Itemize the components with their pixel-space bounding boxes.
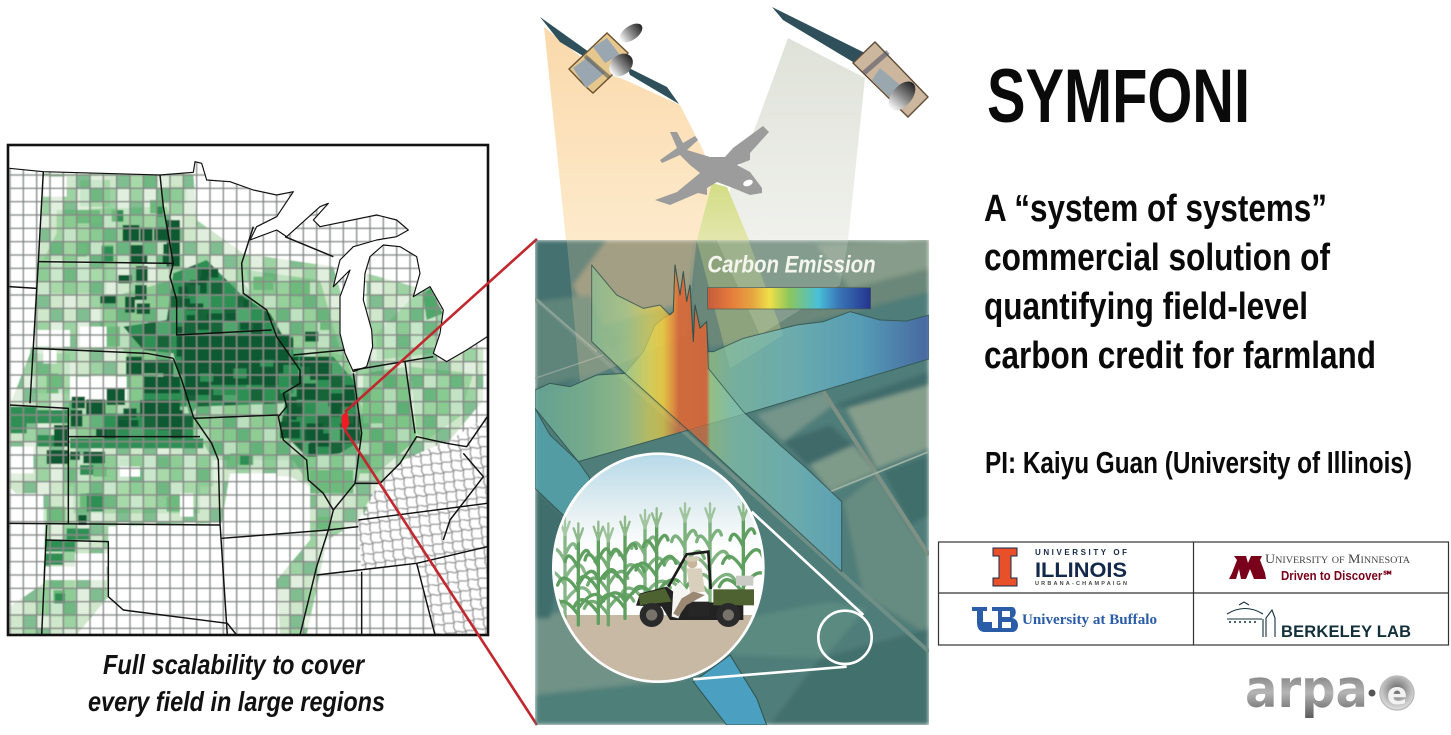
description: commercial solution of bbox=[984, 237, 1330, 279]
legend: carbon emission colour bar: Carbon Emission bbox=[707, 251, 876, 278]
map frame bbox=[8, 145, 488, 635]
emission curtains bbox=[535, 265, 929, 725]
description: quantifying field-level bbox=[984, 286, 1308, 328]
map caption bbox=[88, 649, 385, 717]
logo: University of Illinois: ILLINOIS bbox=[1035, 559, 1127, 582]
county-level mottling bbox=[9, 173, 483, 635]
logo: University of Minnesota: Driven to Discover℠ bbox=[1281, 569, 1394, 583]
callout lines from map to field panel bbox=[342, 239, 537, 725]
corn plants bbox=[541, 502, 769, 625]
logo: University of Minnesota bbox=[1229, 552, 1411, 583]
partner logo table bbox=[938, 542, 1448, 645]
map: crop intensity by county bbox=[8, 145, 488, 635]
logo: University at Buffalo: University at Buffalo bbox=[1022, 612, 1157, 628]
logo: ARPA-E: e bbox=[1387, 677, 1407, 712]
county boundaries bbox=[8, 145, 488, 635]
aircraft bbox=[655, 126, 769, 205]
field panel: aerial image with carbon emission curtain bbox=[535, 238, 929, 725]
description: A “system of systems” bbox=[984, 188, 1327, 230]
map caption: every field in large regions bbox=[88, 686, 385, 717]
zoom lens bbox=[693, 512, 872, 679]
logo: University of Illinois: UNIVERSITY OF bbox=[1035, 548, 1127, 557]
logo: Berkeley Lab: BERKELEY LAB bbox=[1281, 623, 1411, 641]
logo: University of Minnesota: University of Minnesota bbox=[1265, 552, 1411, 566]
map caption: Full scalability to cover bbox=[103, 649, 366, 680]
inset: corn field and field vehicle bbox=[541, 454, 770, 685]
description: carbon credit for farmland bbox=[984, 335, 1376, 377]
satellite and aircraft sensor beams bbox=[544, 27, 865, 240]
utility vehicle with driver bbox=[636, 552, 754, 627]
legend: carbon emission colour bar bbox=[707, 251, 876, 309]
logo: University at Buffalo bbox=[972, 607, 1157, 632]
satellite 1 bbox=[540, 17, 679, 104]
beam overlays on the panel bbox=[567, 240, 697, 382]
logo: University of Illinois: URBANA-CHAMPAIGN bbox=[1035, 581, 1127, 587]
logo: ARPA-E: arpa bbox=[1245, 659, 1368, 720]
satellite 2 bbox=[772, 7, 928, 117]
logo: Berkeley Lab bbox=[1227, 602, 1411, 641]
title: SYMFONI bbox=[987, 54, 1250, 139]
logo: University of Illinois bbox=[993, 548, 1127, 587]
county choropleth fills bbox=[9, 173, 483, 635]
coastline and state borders bbox=[9, 162, 487, 635]
aerial farmland bbox=[535, 238, 929, 725]
roads bbox=[535, 298, 929, 652]
description bbox=[984, 188, 1376, 377]
